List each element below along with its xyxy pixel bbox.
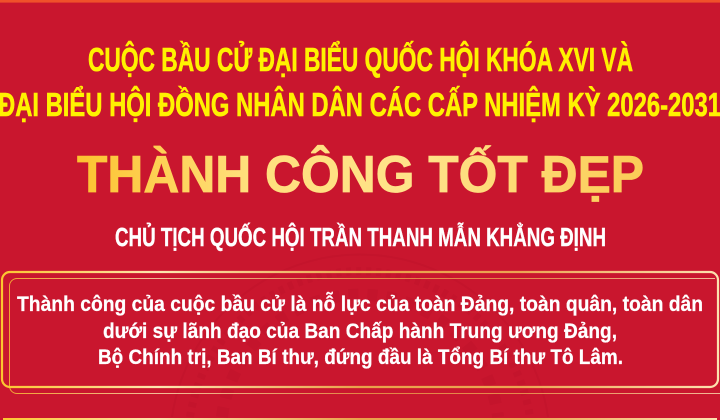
panel: quote frame (2, 272, 720, 394)
quote line 2: dưới sự lãnh đạo của Ban Chấp hành Trung ương Đảng, (103, 319, 617, 343)
quote line 3: Bộ Chính trị, Ban Bí thư, đứng đầu là Tổng Bí thư Tô Lâm. (98, 345, 623, 369)
heading: election title (0, 40, 720, 123)
main title: THÀNH CÔNG TỐT ĐẸP (77, 145, 644, 204)
top accent strip (0, 0, 720, 3)
next panel top edge (3, 418, 717, 420)
inner gold frame (10, 278, 720, 394)
outer gold frame (2, 272, 718, 387)
quote text (17, 291, 703, 369)
faint emblem watermark (172, 254, 548, 417)
